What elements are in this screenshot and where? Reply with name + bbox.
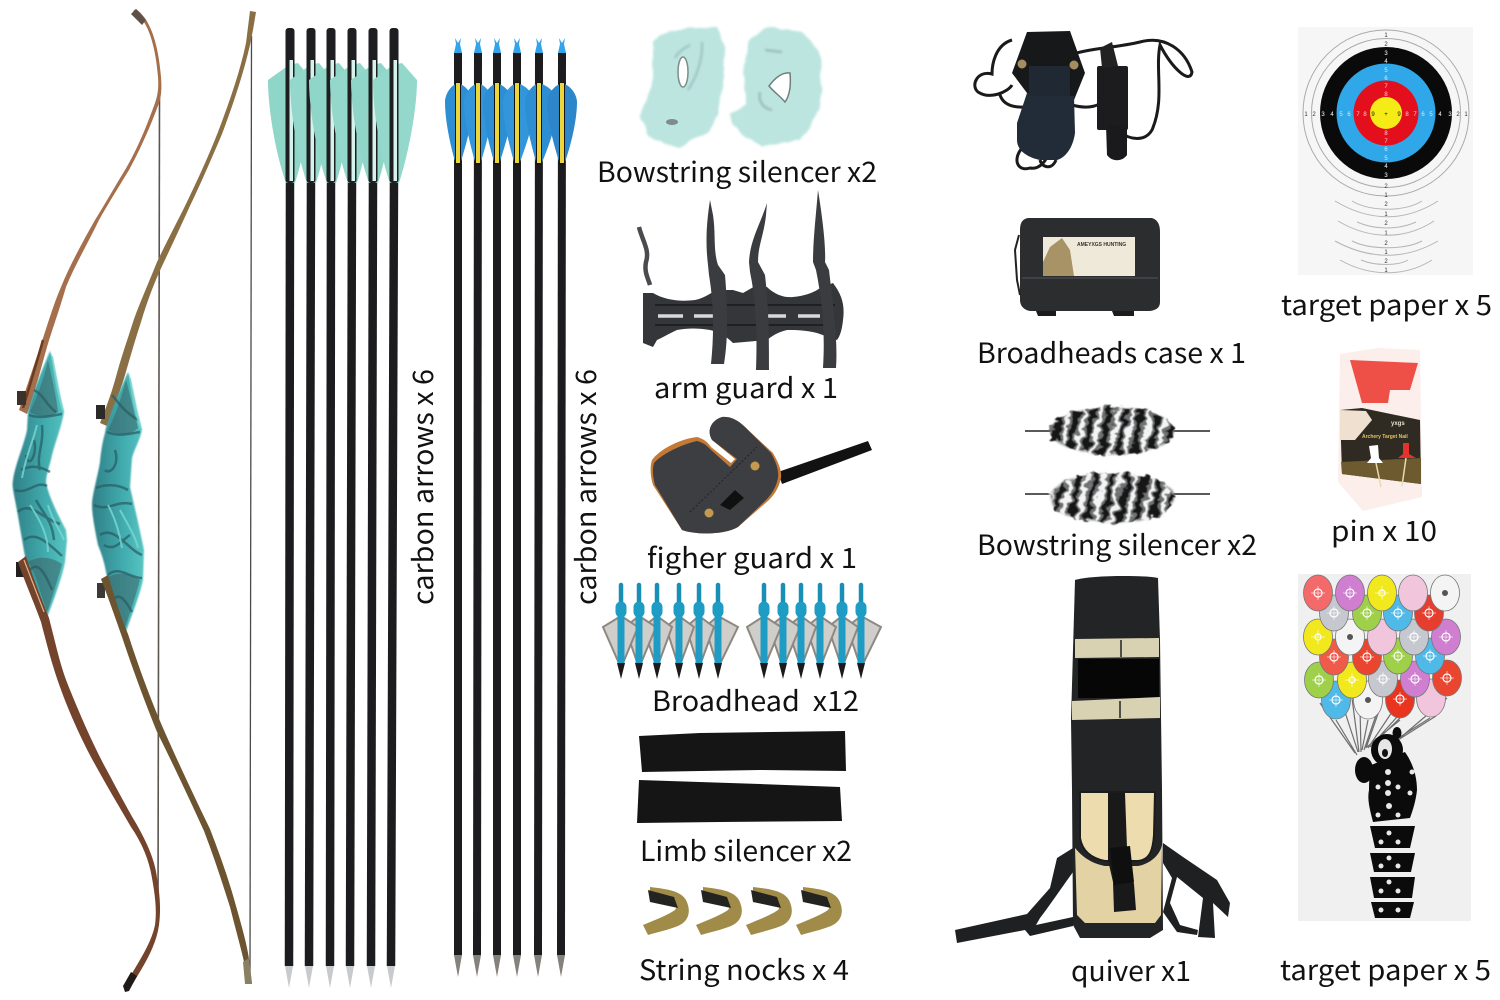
lower sight bracket xyxy=(97,583,105,598)
shaft overlay xyxy=(455,82,565,165)
silver tips xyxy=(285,966,395,988)
ring numerals: 2 xyxy=(1384,202,1388,208)
riser xyxy=(13,351,67,617)
ring numerals: 1 xyxy=(1384,193,1388,199)
clown face xyxy=(1378,739,1392,759)
velcro band xyxy=(1029,66,1070,96)
wrist pad xyxy=(1097,66,1128,130)
arrow 2 fletching xyxy=(290,28,333,183)
arrow 4 vanes xyxy=(503,83,535,165)
riser shaded upper section xyxy=(108,380,138,434)
left shoulder strap xyxy=(955,848,1073,943)
elastic cords xyxy=(975,40,1192,169)
centre strap xyxy=(1108,793,1136,912)
ring numerals: 6 xyxy=(1347,112,1351,118)
wires xyxy=(1025,431,1210,494)
blue ring xyxy=(1336,64,1436,162)
arrow 3 vanes xyxy=(483,83,513,165)
sight bracket xyxy=(96,405,105,419)
arm guard xyxy=(639,190,844,370)
lower tan band xyxy=(1072,697,1160,720)
product label xyxy=(1043,237,1135,276)
strap 2 xyxy=(707,200,727,364)
ring numerals: 2 xyxy=(1384,241,1388,247)
recurve bow, side view xyxy=(92,11,256,984)
clown silhouette xyxy=(1355,727,1417,822)
pocket lower xyxy=(1075,845,1162,923)
lower body strip 3 xyxy=(1370,877,1415,898)
arrow 1 fletching xyxy=(268,28,312,183)
ring numerals: 9 xyxy=(1397,112,1401,118)
ring numerals: 4 xyxy=(1438,112,1442,118)
left fur shading xyxy=(675,42,702,90)
label: pin x 10: pin x 10 xyxy=(1331,510,1437,550)
blue nocks xyxy=(454,38,566,53)
arrow 2 vanes xyxy=(464,83,493,165)
ring numerals: 7 xyxy=(1384,84,1388,90)
right fur xyxy=(730,27,821,146)
shafts xyxy=(289,175,394,966)
lower limb silencer xyxy=(637,780,842,823)
ring numerals: 3 xyxy=(1384,173,1388,179)
guard ribs xyxy=(655,305,835,325)
case latches xyxy=(1036,311,1134,316)
blue ferrule stems xyxy=(621,585,861,610)
target pins box xyxy=(1338,348,1422,511)
carbon arrows set with blue feathers xyxy=(445,38,577,977)
lower limb veneer xyxy=(24,560,44,612)
lower limb tip xyxy=(123,972,137,992)
label: target paper x 5, rings: target paper x 5 xyxy=(1281,284,1492,324)
lower limb xyxy=(101,575,252,984)
band stitch lines xyxy=(1120,640,1121,718)
upper fur xyxy=(1051,407,1175,455)
riser highlights xyxy=(108,378,141,548)
ring numerals: 9 xyxy=(1371,112,1375,118)
paper xyxy=(1298,27,1473,275)
paper xyxy=(1298,574,1471,921)
clown mouth xyxy=(1382,749,1388,757)
upper limb tip xyxy=(131,9,146,25)
steel blades xyxy=(603,616,881,668)
ring numerals: 4 xyxy=(1384,164,1388,170)
box name: yxgs xyxy=(1391,421,1405,427)
lower body strip 2 xyxy=(1370,853,1415,872)
right fur shading xyxy=(760,50,782,110)
riser shaded lower section xyxy=(106,574,140,628)
grass xyxy=(1341,458,1421,484)
hand xyxy=(1355,757,1373,783)
ring numerals: + xyxy=(1384,112,1388,118)
bow string xyxy=(250,36,252,972)
ring numerals: 3 xyxy=(1448,112,1452,118)
arrow 1 vanes xyxy=(445,83,473,165)
pad top loop xyxy=(1100,42,1118,68)
bow string xyxy=(158,95,160,915)
guard face xyxy=(653,417,778,533)
upper limb xyxy=(19,9,161,414)
label: Bowstring silencer x2, right column: Bowstring silencer x2 xyxy=(977,524,1257,564)
balloons row 2 xyxy=(1320,595,1444,631)
bowstring silencer, teal fur pair xyxy=(640,27,821,148)
guard slots xyxy=(658,314,820,318)
white pin xyxy=(1367,445,1383,463)
riser highlights xyxy=(22,356,64,552)
blue ferrule bodies xyxy=(621,604,861,663)
white pin stem xyxy=(1376,463,1381,487)
limb silencers xyxy=(637,731,846,823)
shafts xyxy=(458,53,562,955)
riser shaded upper section xyxy=(30,360,58,416)
ring numerals: 2 xyxy=(1456,112,1460,118)
tube body xyxy=(1071,576,1163,938)
ring numerals: 1 xyxy=(1464,112,1468,118)
upper limb inner veneer xyxy=(23,340,43,408)
balloon bullseyes xyxy=(1311,586,1454,707)
arrow 5 fletching xyxy=(351,28,395,183)
broadheads case xyxy=(1015,218,1160,316)
label: target paper x 5, balloons: target paper x 5 xyxy=(1280,949,1491,989)
finger spacer clip xyxy=(720,490,744,510)
black points xyxy=(617,663,865,679)
body xyxy=(1368,752,1417,822)
balloons row 3 xyxy=(1304,619,1460,655)
velcro patch xyxy=(1078,659,1159,698)
buckle xyxy=(1110,846,1134,885)
nock 3 xyxy=(746,887,792,935)
ring numerals: 4 xyxy=(1330,112,1334,118)
arrow 6 vanes xyxy=(547,83,577,165)
hat xyxy=(1392,727,1402,739)
target paper, archery rings xyxy=(1298,27,1473,275)
box subtitle: Archery Target Nail xyxy=(1362,434,1408,440)
score rings xyxy=(1303,30,1469,196)
label heading: AMEYXGS HUNTING xyxy=(1077,242,1126,248)
steel tips xyxy=(454,955,565,977)
target paper, balloons and clown xyxy=(1298,574,1471,921)
label: carbon arrows x 6, first set: carbon arrows x 6 xyxy=(402,369,442,605)
shooting glove with cords xyxy=(975,31,1192,169)
lower fur xyxy=(1051,473,1175,523)
ring numerals: 4 xyxy=(1384,59,1388,65)
upper limb xyxy=(100,11,256,426)
arrow 6 fletching xyxy=(373,28,417,183)
balloons row 1 xyxy=(1304,575,1460,611)
label: figher guard x 1: figher guard x 1 xyxy=(647,537,857,577)
ring numerals: 3 xyxy=(1384,51,1388,57)
label: Broadheads case x 1: Broadheads case x 1 xyxy=(977,332,1246,372)
riser wood grain xyxy=(94,395,142,612)
ring numerals: 5 xyxy=(1339,112,1343,118)
balloons row 6 xyxy=(1322,679,1446,719)
ring numerals: 6 xyxy=(1421,112,1425,118)
hair xyxy=(1371,734,1403,766)
red pin xyxy=(1398,443,1416,458)
upper fur underlay xyxy=(1050,408,1174,454)
guard body xyxy=(643,283,844,347)
label white panel xyxy=(1340,410,1372,440)
ring numerals: 7 xyxy=(1384,139,1388,145)
finger guard xyxy=(651,417,872,533)
pocket flap xyxy=(1080,792,1155,861)
dark bullseyes on white balloons xyxy=(1347,590,1448,703)
ring numerals: 8 xyxy=(1384,92,1388,98)
lid seam xyxy=(1022,277,1158,279)
pad lower tab xyxy=(1106,125,1127,160)
lower sight bracket xyxy=(16,562,24,577)
string nocks xyxy=(643,887,842,935)
riser xyxy=(92,372,144,634)
wrist strap xyxy=(778,441,872,484)
ring numerals: 1 xyxy=(1384,268,1388,274)
label: Bowstring silencer x2: Bowstring silencer x2 xyxy=(597,151,877,191)
left fur clasp xyxy=(666,119,678,125)
ring numerals: 6 xyxy=(1384,147,1388,153)
ferrule collars xyxy=(621,607,861,612)
left fur xyxy=(640,27,725,148)
ring numerals: 6 xyxy=(1384,76,1388,82)
ring numerals: 3 xyxy=(1321,112,1325,118)
yellow ring xyxy=(1370,97,1402,129)
ring numerals: 2 xyxy=(1384,259,1388,265)
ring numerals: 2 xyxy=(1312,112,1316,118)
brass rivets xyxy=(704,462,760,518)
box label xyxy=(1340,408,1421,484)
black ring xyxy=(1320,47,1452,179)
label: Broadhead x12: Broadhead x12 xyxy=(652,680,859,720)
sight bracket xyxy=(17,391,26,405)
lower arcs xyxy=(1335,201,1438,273)
top leather xyxy=(1012,31,1085,100)
lower limb tip xyxy=(243,958,252,984)
lower limb xyxy=(18,556,160,990)
carbon arrows set with teal feathers xyxy=(268,28,417,988)
ring numerals: 8 xyxy=(1405,112,1409,118)
strap 3 xyxy=(749,203,769,370)
clear box xyxy=(1338,348,1422,511)
yellow stripes xyxy=(456,83,564,163)
ring numerals: 7 xyxy=(1356,112,1360,118)
ring numerals: 1 xyxy=(1384,33,1388,39)
label art xyxy=(1043,238,1074,276)
ring numerals: 2 xyxy=(1384,42,1388,48)
red ring xyxy=(1354,80,1418,146)
strap 1 xyxy=(639,227,650,285)
broadheads, twelve pieces xyxy=(603,585,881,679)
riser shaded lower section xyxy=(28,558,62,612)
label: quiver x1: quiver x1 xyxy=(1071,950,1191,990)
nock 1 xyxy=(643,887,689,935)
ring numerals: 8 xyxy=(1384,131,1388,137)
nock 2 xyxy=(696,887,742,935)
label: arm guard x 1: arm guard x 1 xyxy=(654,367,838,407)
nock 4 xyxy=(796,887,842,935)
label: carbon arrows x 6, second set: carbon arrows x 6 xyxy=(565,369,605,605)
ring numerals: 1 xyxy=(1384,250,1388,256)
riser wood grain xyxy=(15,390,62,590)
left fur hole xyxy=(678,57,688,87)
strap 4 xyxy=(813,190,836,368)
hinge xyxy=(1015,235,1020,295)
palm pad xyxy=(1017,93,1075,160)
ring numerals: 1 xyxy=(1384,212,1388,218)
label: String nocks x 4: String nocks x 4 xyxy=(639,949,849,989)
ring numerals: 1 xyxy=(1384,231,1388,237)
red pin heads xyxy=(1350,360,1418,403)
ring numerals: 7 xyxy=(1413,112,1417,118)
upper tan band xyxy=(1075,638,1159,658)
ring numerals xyxy=(1304,33,1468,274)
clown body targets xyxy=(1376,769,1414,818)
red pin stem xyxy=(1402,458,1406,486)
bowstring silencer, black and white fur pair xyxy=(1025,407,1210,523)
balloon strings xyxy=(1320,695,1447,755)
balloons row 4 xyxy=(1320,638,1444,675)
ring numerals: 5 xyxy=(1429,112,1433,118)
upper limb silencer xyxy=(639,731,846,772)
seam xyxy=(690,447,757,512)
arrow 4 fletching xyxy=(330,28,374,183)
label: Limb silencer x2: Limb silencer x2 xyxy=(640,830,852,870)
rivets xyxy=(1018,60,1078,70)
right fur hole xyxy=(769,73,790,102)
quiver xyxy=(955,576,1230,943)
case body xyxy=(1020,218,1160,311)
ring numerals: 5 xyxy=(1384,156,1388,162)
ring numerals: 1 xyxy=(1304,112,1308,118)
right shoulder strap xyxy=(1163,843,1230,938)
lower fur underlay xyxy=(1050,474,1174,522)
balloons row 5 xyxy=(1304,660,1462,698)
arrow 3 fletching xyxy=(309,28,353,183)
strip targets xyxy=(1378,830,1400,912)
leather backing xyxy=(651,417,781,533)
lower body strip 1 xyxy=(1370,826,1415,848)
ring numerals: 5 xyxy=(1384,68,1388,74)
arrow 5 vanes xyxy=(525,83,558,165)
ring numerals: 2 xyxy=(1384,221,1388,227)
recurve bow, front view xyxy=(13,9,161,992)
lower body strip 4 xyxy=(1371,902,1414,918)
ring numerals: 2 xyxy=(1384,184,1388,190)
ring numerals: 8 xyxy=(1363,112,1367,118)
